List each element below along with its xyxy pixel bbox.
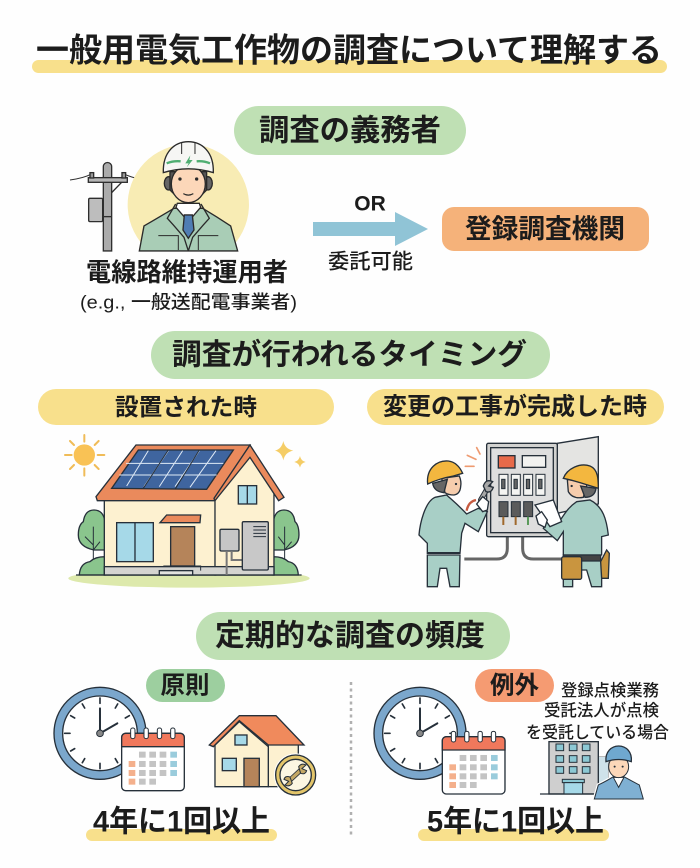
box: 登録調査機関 <box>442 207 649 251</box>
heading: 調査の義務者: 調査の義務者 <box>259 114 441 148</box>
note: exception condition: 登録点検業務 <box>561 681 659 700</box>
heading: 調査が行われるタイミング <box>151 331 550 379</box>
note: exception condition: 受託法人が点検 <box>544 700 659 720</box>
label: 委託可能: 委託可能 <box>328 250 413 274</box>
pill: 設置された時 <box>38 389 334 425</box>
label: 一般送配電事業者: (e.g., 一般送配電事業者) <box>80 292 297 312</box>
label: 電線路維持運用者: 電線路維持運用者 <box>86 259 288 287</box>
pill: 設置された時: 設置された時 <box>115 394 257 420</box>
heading: 調査の義務者 <box>234 106 466 155</box>
pill: 変更の工事が完成した時: 変更の工事が完成した時 <box>383 392 647 420</box>
pill: 原則: 原則 <box>160 672 210 700</box>
label: OR: OR <box>354 192 386 216</box>
note: exception condition: を受託している場合 <box>526 723 669 742</box>
illustration: house with solar panels <box>65 435 310 588</box>
pill: 原則 <box>146 669 225 702</box>
title: 一般用電気工作物の調査について理解する <box>36 32 662 68</box>
pill: 例外 <box>475 669 554 702</box>
heading: 調査が行われるタイミング: 調査が行われるタイミング <box>172 338 527 372</box>
icon: utility pole <box>70 162 146 251</box>
note: exception condition <box>526 681 669 742</box>
frequency: 5年に1回以上: 5年に1回以上 <box>427 806 604 838</box>
icon: clock and calendar, standard case <box>54 687 184 791</box>
icon: clock and calendar, exception case <box>374 687 505 794</box>
icon: office building and inspector <box>540 742 643 799</box>
icon: house with wrench badge <box>209 716 317 797</box>
pill: 変更の工事が完成した時 <box>367 389 664 425</box>
box: 登録調査機関: 登録調査機関 <box>465 214 625 244</box>
arrow: delegation <box>313 212 428 246</box>
heading: 定期的な調査の頻度 <box>196 612 510 660</box>
frequency: 4年に1回以上: 4年に1回以上 <box>93 806 270 838</box>
icon: worker in helmet <box>128 142 249 251</box>
heading: 定期的な調査の頻度: 定期的な調査の頻度 <box>215 620 485 652</box>
illustration: workers at switchboard <box>419 437 609 587</box>
pill: 例外: 例外 <box>490 672 539 700</box>
divider <box>350 682 352 838</box>
